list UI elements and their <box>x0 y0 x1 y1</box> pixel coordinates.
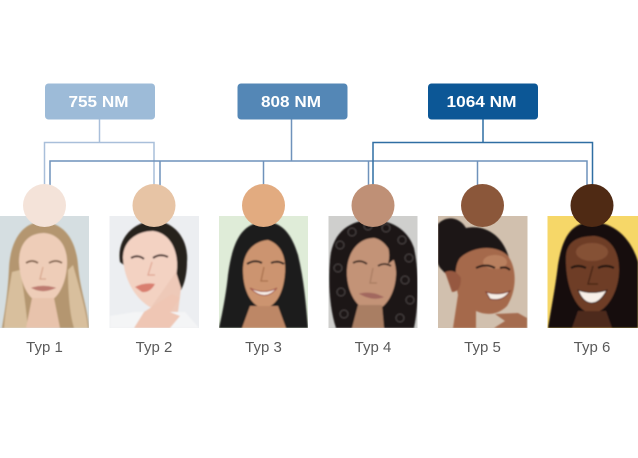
box: 808 NM <box>238 84 348 120</box>
box: 808 NM: 808 NM <box>261 94 321 111</box>
connector lines: 1064 NM <box>373 119 592 186</box>
portrait: type 3 <box>219 216 308 328</box>
label: Typ 6: Typ 6 <box>574 339 610 356</box>
label: Typ 5: Typ 5 <box>464 339 501 356</box>
box: 755 NM: 755 NM <box>68 94 128 111</box>
connector lines: 808 NM <box>50 119 587 186</box>
portrait: type 6 <box>548 216 638 328</box>
box: 755 NM <box>45 84 155 120</box>
label: Typ 2: Typ 2 <box>136 339 172 356</box>
swatch: type 2 <box>132 184 176 227</box>
portrait: type 2 <box>110 216 199 328</box>
swatch: type 3 <box>242 184 285 227</box>
label: Typ 3: Typ 3 <box>245 339 282 356</box>
portrait: type 1 <box>0 216 89 328</box>
swatch: type 6 <box>570 184 614 227</box>
skin type laser diagram <box>0 84 638 355</box>
portrait: type 4 <box>328 216 418 328</box>
swatch: type 4 <box>352 184 394 227</box>
connector lines: 755 NM <box>44 119 154 186</box>
box: 1064 NM: 1064 NM <box>446 94 516 111</box>
box: 1064 NM <box>428 84 538 120</box>
portrait: type 5 <box>438 216 528 328</box>
swatch: type 5 <box>461 184 504 227</box>
label: Typ 1: Typ 1 <box>26 339 63 356</box>
label: Typ 4: Typ 4 <box>355 339 391 356</box>
swatch: type 1 <box>23 184 66 227</box>
